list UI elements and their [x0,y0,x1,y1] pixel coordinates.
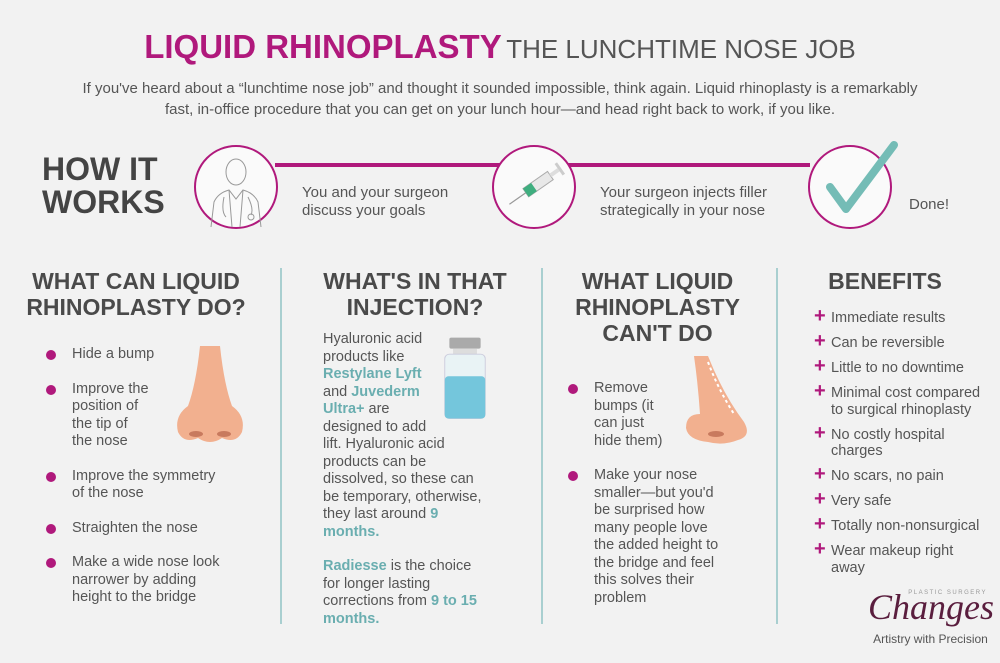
panel: what liquid rhinoplasty can't do [568,268,747,606]
benefit list [814,305,980,576]
bullet list: Straighten the nose [72,520,198,536]
panel: benefits: + [814,380,826,402]
bullet list [46,346,220,605]
step 3 text: Done! [909,196,949,213]
body text with vial: Hyaluronic acid products like Restylane Lyft and Juvederm Ultra+ are designed to add lift. Hyaluronic acid products can be dissolved, so these can be temporary, otherwise, they last around 9 months. [323,331,482,540]
logo: Changes [868,587,994,627]
bullet list: Make your nose smaller—but you'd be surprised how many people love the added height to the bridge and feel this solves their problem [594,467,718,606]
bullet list: Remove bumps (it can just hide them) [594,380,663,448]
benefit list: Very safe [831,493,891,509]
step 1: doctor icon [194,145,278,229]
benefit list: Little to no downtime [831,360,964,376]
benefit list: No costly hospital charges [831,426,945,459]
body text with vial: Radiesse is the choice for longer lasting corrections from 9 to 15 months. [323,558,477,626]
timeline line [275,163,810,167]
bullet list: narrower by adding [72,572,196,588]
how it works heading: HOW IT [42,151,158,187]
heading: WHAT LIQUID RHINOPLASTY CAN'T DO [575,268,740,346]
benefit list: Minimal cost compared to surgical rhinoplasty [831,385,980,418]
bullet list [568,380,718,606]
bullet list: Improve the symmetry [72,468,215,484]
benefit list: Wear makeup right away [831,543,953,576]
how it works heading: WORKS [42,184,165,220]
step 2: syringe icon [492,145,576,229]
panel: benefits: + [814,463,826,485]
benefit list: Immediate results [831,310,945,326]
benefit list: Totally non-nonsurgical [831,518,979,534]
step 1 text: discuss your goals [302,202,425,218]
panel: benefits: + [814,513,826,535]
panel: benefits: + [814,355,826,377]
bullet list: height to the bridge [72,589,196,605]
body text with vial [323,331,486,626]
panel: benefits: + [814,488,826,510]
bullet list: Improve the [72,380,149,396]
heading: WHAT CAN LIQUID RHINOPLASTY DO? [26,268,246,320]
heading: WHAT'S IN THAT INJECTION? [323,268,507,320]
bullet list: Make a wide nose look [72,554,220,570]
step 2 text [600,184,767,218]
panel: what's in that injection [323,268,507,626]
how it works heading [42,151,165,220]
bullet list: position of [72,398,138,414]
panel: what can liquid rhinoplasty do [26,268,246,605]
bullet list: the nose [72,433,128,449]
panel: benefits: + [814,538,826,560]
icon: vial [444,338,486,419]
panel: benefits: + [814,330,826,352]
step 1 text: You and your surgeon [302,184,448,201]
benefit list: No scars, no pain [831,468,944,484]
heading: BENEFITS [828,268,942,294]
logo: PLASTIC SURGERY [908,590,987,596]
logo [868,587,994,646]
icon: nose front [177,346,243,442]
logo: Artistry with Precision [873,632,988,646]
panel: benefits [814,268,980,576]
step 3: check icon [808,145,892,229]
panel: benefits: + [814,422,826,444]
intro text: If you've heard about a “lunchtime nose job” and thought it sounded impossible, think again. Liquid rhinoplasty is a remarkably fast, in-office procedure that you can get on your lunch hour—and head right back to work, if you like. [82,80,918,118]
bullet list: Hide a bump [72,346,154,362]
benefit list: Can be reversible [831,335,945,351]
icon: nose side [686,356,747,444]
bullet list: the tip of [72,416,128,432]
step 1 text [302,184,448,218]
panel: benefits: + [814,305,826,327]
step 2 text: Your surgeon injects filler [600,184,767,201]
step 2 text: strategically in your nose [600,202,765,218]
title: LIQUID RHINOPLASTY THE LUNCHTIME NOSE JOB [144,28,856,65]
bullet list: of the nose [72,485,144,501]
